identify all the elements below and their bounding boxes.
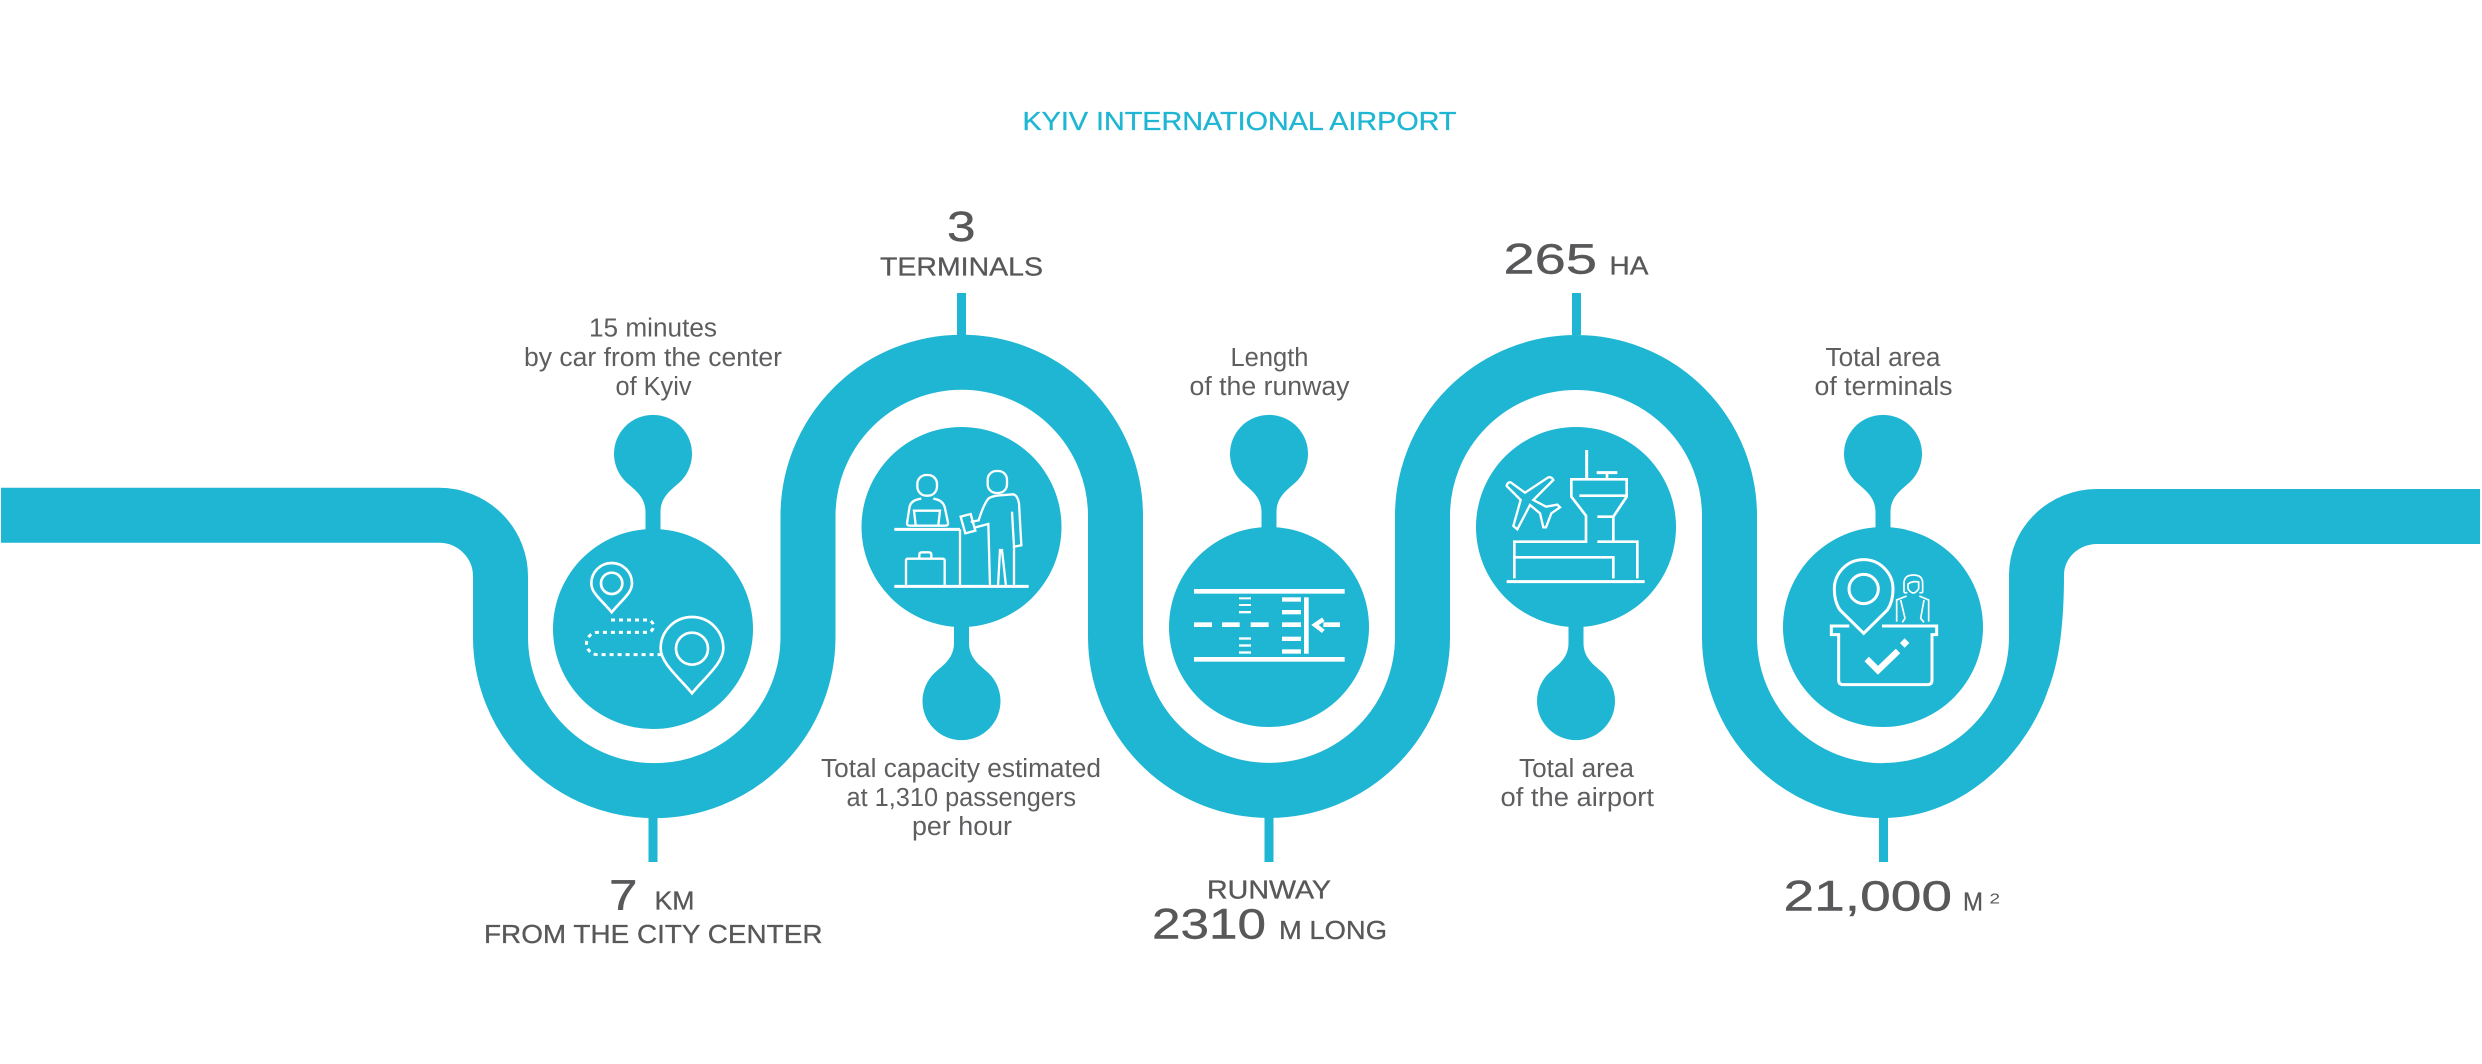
pin connector node: [1230, 415, 1308, 535]
disc: [1476, 427, 1676, 627]
text: 15 minutes by car: by car from the center: [524, 344, 783, 372]
text: total area of the airport: Total area: [1519, 755, 1635, 783]
stat: 265 ha: HA: [1610, 252, 1648, 280]
tick: terminals: [957, 293, 966, 335]
text: total area of terminals: Total area: [1826, 344, 1941, 372]
text: length of the runway: [1190, 344, 1350, 401]
stat: 7 km from the city center: [484, 872, 822, 949]
disc: [1783, 527, 1983, 727]
text: total area of the airport: [1500, 755, 1654, 812]
pin connector node: [1844, 415, 1922, 535]
text: total capacity: at 1,310 passengers: [846, 784, 1076, 812]
text: total capacity: Total capacity estimated: [821, 755, 1101, 783]
icon: two map pins with dotted route: [586, 563, 723, 693]
icon: runway diagram with arrow: [1194, 589, 1345, 662]
stat: 265 ha: [1504, 235, 1648, 283]
tick: 7 km: [648, 817, 658, 862]
stat: 21,000 m2: [1784, 873, 2000, 921]
disc: [1169, 527, 1369, 727]
stat: 3 terminals: 3: [947, 203, 976, 251]
text: total capacity: [821, 755, 1101, 841]
disc: [862, 427, 1062, 627]
stat: 7 km from the city center: KM: [654, 888, 694, 916]
panel: runway: [1169, 415, 1369, 727]
text: 15 minutes by car: 15 minutes: [589, 314, 717, 342]
pin connector node: [614, 415, 692, 535]
text: 15 minutes by car: [524, 314, 783, 401]
text: total capacity: per hour: [912, 813, 1013, 841]
panel: terminal area: [1783, 415, 1983, 727]
stat: runway 2310 m long: M LONG: [1279, 917, 1387, 945]
stat: runway 2310 m long: 2310: [1152, 901, 1266, 949]
stat: runway 2310 m long: RUNWAY: [1207, 876, 1331, 904]
panel: terminals: [862, 427, 1062, 740]
text: length of the runway: of the runway: [1190, 373, 1350, 401]
title: KYIV INTERNATIONAL AIRPORT: [1022, 108, 1456, 136]
stat: 21,000 m2: 21,000: [1784, 873, 1952, 921]
tick: runway: [1264, 817, 1274, 862]
icon: check-in desk: [894, 471, 1029, 586]
panel: distance from city: [553, 415, 753, 729]
disc: [553, 529, 753, 729]
stat: 7 km from the city center: 7: [609, 872, 638, 920]
icon: pin, attendant and desk: [1831, 560, 1937, 685]
icon: control tower and plane: [1507, 450, 1645, 582]
stat: 21,000 m2: 2: [1990, 890, 2000, 908]
stat: 3 terminals: TERMINALS: [880, 253, 1043, 281]
text: total area of the airport: of the airport: [1500, 784, 1654, 812]
stat: 265 ha: 265: [1504, 235, 1597, 283]
pin connector node: [1537, 620, 1615, 740]
stat: 7 km from the city center: FROM THE CITY CENTER: [484, 921, 822, 949]
text: 15 minutes by car: of Kyiv: [616, 373, 692, 401]
tick: hectares: [1572, 293, 1581, 335]
text: total area of terminals: [1814, 344, 1952, 401]
panel: airport area: [1476, 427, 1676, 740]
winding road track: [1, 362, 2480, 818]
stat: 21,000 m2: M: [1963, 889, 1983, 917]
text: total area of terminals: of terminals: [1814, 373, 1952, 401]
text: length of the runway: Length: [1230, 344, 1308, 372]
tick: terminal area: [1879, 817, 1888, 862]
stat: runway 2310 m long: [1152, 876, 1387, 949]
pin connector node: [922, 620, 1001, 740]
stat: 3 terminals: [880, 203, 1043, 281]
